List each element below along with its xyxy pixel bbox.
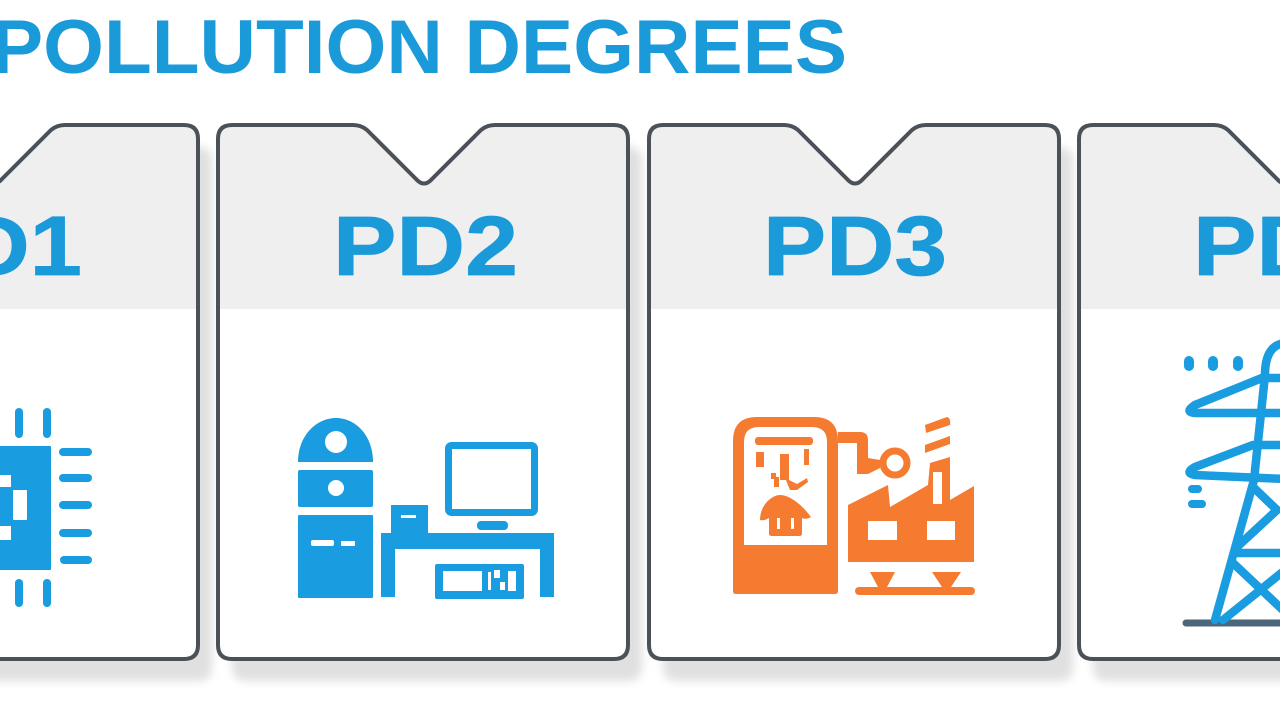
icon: microchip bbox=[0, 408, 92, 607]
icon: industrial machine and factory bbox=[733, 417, 975, 595]
heading: PD2: PD2 bbox=[333, 199, 518, 293]
panel: PD2 card bbox=[218, 125, 642, 681]
icon: transmission tower bbox=[1184, 343, 1280, 623]
title: POLLUTION DEGREES bbox=[0, 5, 847, 90]
heading: PD3: PD3 bbox=[763, 199, 947, 293]
panel: PD1 card bbox=[0, 125, 212, 681]
panel: PD4 card bbox=[1079, 125, 1280, 681]
icon: desktop computer workstation bbox=[298, 418, 554, 599]
panel: PD3 card bbox=[649, 125, 1073, 681]
